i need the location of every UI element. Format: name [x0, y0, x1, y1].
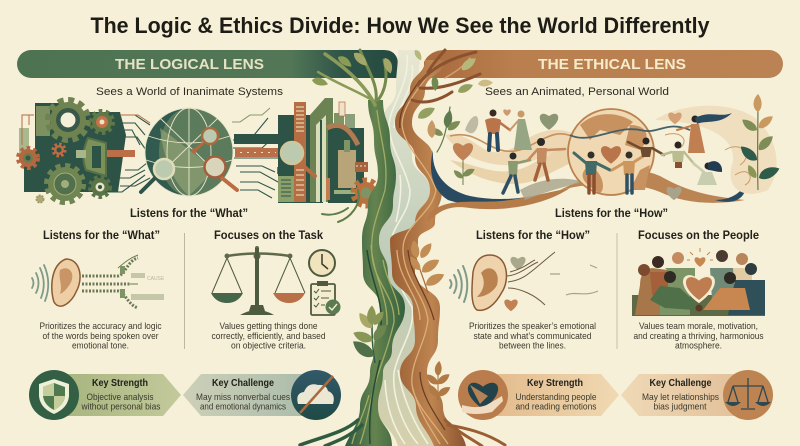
icon: magnifier top: [192, 128, 218, 154]
callout: ethical key strength: Understanding people: [516, 392, 596, 402]
river: [378, 50, 445, 446]
text: logical task: Values getting things done: [220, 321, 318, 331]
illustration: gears and circuitry: [18, 100, 150, 202]
person 5: [574, 152, 610, 193]
icon: ear with data streams: [32, 255, 165, 308]
callout: ethical key strength: [458, 370, 619, 420]
person 7: [628, 138, 664, 157]
heading: listens for the how (upper): Listens for the “How”: [555, 208, 668, 220]
gear: small orange centre: [91, 111, 113, 133]
brown branches and roots: [412, 50, 505, 446]
callout: logical key strength: Objective analysis: [86, 392, 154, 402]
heart brown large: [452, 143, 476, 185]
callout: logical key challenge: Key Challenge: [212, 377, 274, 389]
callout: ethical key strength: and reading emotions: [516, 402, 597, 412]
person 6: [612, 152, 645, 193]
illustration: animated personal world: [428, 94, 781, 203]
text: logical listening: of the words being spoken over: [42, 331, 158, 341]
heart centre: [601, 146, 621, 164]
banner: the ethical lens: THE ETHICAL LENS: [538, 56, 686, 73]
heading: listens for the what (upper): Listens for the “What”: [130, 208, 248, 220]
heart tan: [668, 112, 682, 124]
person 3: [503, 152, 530, 193]
icon: crossed cloud: [291, 370, 341, 420]
text: ethical people: [634, 321, 764, 350]
gear: half centre: [83, 138, 106, 176]
icon: clock: [309, 250, 335, 276]
text: ethical people: Values team morale, motivation,: [639, 321, 758, 331]
icon: magnifier left: [141, 159, 174, 192]
heart grey-green: [540, 114, 558, 130]
icon: orange gear: [353, 180, 379, 206]
leaf sprig: brown upper: [407, 240, 446, 293]
text: ethical people: and creating a thriving, harmonious: [634, 331, 764, 341]
icon: shield: [29, 370, 79, 420]
person 1: [485, 110, 510, 150]
title: The Logic & Ethics Divide: How We See the World Differently: [90, 13, 710, 38]
person 10: [693, 161, 722, 185]
central tree: [300, 48, 570, 446]
banner: the logical lens: THE LOGICAL LENS: [115, 56, 264, 73]
callout: logical key strength: Key Strength: [92, 377, 148, 389]
icon: balance scale: [211, 246, 305, 315]
callout: ethical key challenge: May let relationships: [642, 392, 719, 402]
subtitle: logical: Sees a World of Inanimate Systems: [96, 86, 284, 98]
illustration: cityscape: [278, 98, 379, 206]
blue ribbon in roots: [431, 150, 533, 205]
callout: logical key strength: without personal bias: [81, 402, 161, 412]
text: logical task: on objective criteria.: [231, 340, 306, 350]
text: logical task: correctly, efficiently, and based: [212, 331, 326, 341]
callout: logical key strength: [29, 370, 181, 420]
person 4: [528, 138, 565, 180]
leaf sprig: green: [349, 306, 390, 363]
gear: large bottom: [47, 166, 83, 202]
icon: clipboard with check: [311, 281, 340, 315]
callout: logical key challenge: [183, 370, 341, 420]
text: ethical listening: [469, 321, 596, 350]
callout: logical key challenge: and emotional dynamics: [200, 402, 286, 412]
leaf plant: left: [428, 109, 462, 138]
gear: orange small: [53, 144, 65, 156]
heading: listens for the what: Listens for the “What”: [43, 228, 160, 242]
icon: hands holding heart: [458, 370, 508, 420]
icon: magnifier city: [281, 142, 315, 176]
globe: [568, 109, 654, 195]
icon: tilted scale: [723, 370, 773, 420]
text: logical listening: Prioritizes the accuracy and logic: [40, 321, 162, 331]
heart grey lower: [666, 187, 682, 200]
small heart with rays: [687, 248, 713, 267]
person 2: [510, 110, 532, 150]
banner: the ethical lens: [424, 50, 783, 78]
person 9: [677, 113, 732, 153]
heart on white halo: [683, 275, 715, 303]
gear: tiny tan: [36, 196, 44, 202]
heart small: [503, 109, 511, 116]
gear: large top: [48, 100, 88, 140]
icon: team huddle with heart: [632, 248, 765, 316]
leaf plant: right: [738, 94, 781, 190]
text: logical listening: [40, 321, 162, 350]
text: ethical people: atmosphere.: [675, 340, 722, 350]
callout: ethical key strength: Key Strength: [527, 377, 583, 389]
icon: magnifier right: [204, 156, 237, 190]
flowing ribbons: [445, 130, 590, 165]
text: ethical listening: state and what’s communicated: [474, 331, 592, 341]
brown trunk: [390, 60, 466, 446]
gear: dark bottom: [90, 177, 110, 197]
text: logical listening: emotional tone.: [72, 340, 129, 350]
icon: ear with data streams: CAUSE: [147, 276, 165, 282]
illustration: circuit traces: [232, 108, 286, 198]
text: logical task: [212, 321, 326, 350]
leaf sprig: brown lower: [424, 361, 452, 400]
icon: ear with hearts: [450, 252, 598, 311]
illustration: globe with magnifiers: [141, 108, 237, 196]
banner: the logical lens: [17, 50, 398, 78]
green branches and roots: [300, 50, 386, 446]
callout: ethical key challenge: [621, 370, 773, 420]
callout: ethical key challenge: Key Challenge: [650, 377, 712, 389]
callout: logical key challenge: May miss nonverbal cues: [196, 392, 290, 402]
leaves on banner branches: [311, 50, 395, 87]
callout: ethical key challenge: bias judgment: [654, 402, 707, 412]
heading: focuses on the task: Focuses on the Task: [214, 228, 323, 242]
text: ethical listening: Prioritizes the speaker’s emotional: [469, 321, 596, 331]
subtitle: ethical: Sees an Animated, Personal World: [485, 86, 669, 98]
text: ethical listening: between the lines.: [499, 340, 566, 350]
green trunk: [345, 100, 405, 446]
gear: orange left: [18, 148, 38, 168]
person 8: [662, 142, 695, 168]
heading: listens for the how: Listens for the “How”: [476, 228, 590, 242]
heading: focuses on the people: Focuses on the People: [638, 228, 759, 242]
